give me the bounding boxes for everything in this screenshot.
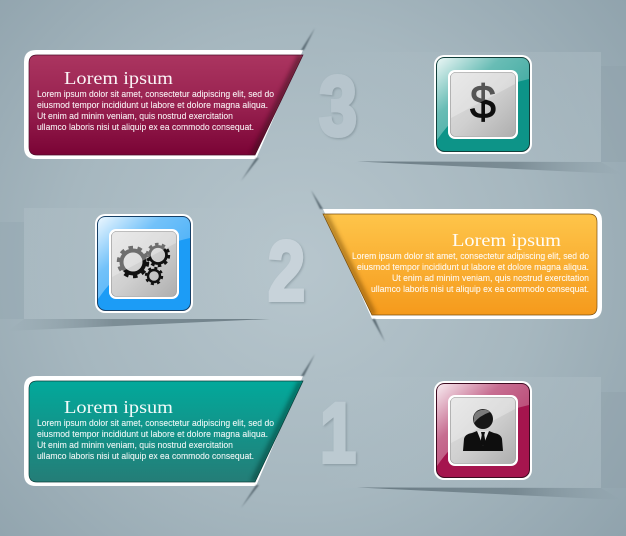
row 1 backdrop: [320, 377, 626, 500]
heading: Lorem ipsum: [64, 68, 173, 88]
body text: eiusmod tempor incididunt ut labore et dolore magna aliqua.: [37, 429, 268, 440]
icon: person: [434, 381, 532, 480]
body text: ullamco laboris nisi ut aliquip ex ea commodo consequat.: [37, 122, 254, 133]
number 1: 1: [320, 386, 356, 480]
body text: [37, 418, 274, 462]
body text: Ut enim ad minim veniam, quis nostrud exercitation: [392, 273, 589, 284]
icon: dollar: $: [470, 75, 496, 128]
panel 1: teal text card: [24, 354, 315, 508]
body text: ullamco laboris nisi ut aliquip ex ea commodo consequat.: [37, 451, 254, 462]
panel 2: orange text card: [311, 190, 602, 342]
row 2 backdrop: [0, 208, 270, 331]
number 3: 3: [319, 59, 357, 153]
body text: Lorem ipsum dolor sit amet, consectetur adipiscing elit, sed do: [37, 418, 274, 429]
gears: [118, 244, 169, 284]
body text: [352, 251, 589, 295]
icon: dollar: [434, 55, 532, 154]
body text: [37, 89, 274, 133]
panel 3: maroon text card: [24, 28, 315, 181]
row 3 backdrop: [320, 52, 626, 174]
slit tips: [241, 354, 315, 508]
slit tips: [241, 28, 315, 181]
body text: Ut enim ad minim veniam, quis nostrud exercitation: [37, 111, 233, 122]
body text: Ut enim ad minim veniam, quis nostrud exercitation: [37, 440, 233, 451]
number 2: 2: [268, 224, 305, 318]
body text: Lorem ipsum dolor sit amet, consectetur adipiscing elit, sed do: [352, 251, 589, 262]
slit tips: [311, 190, 385, 342]
heading: Lorem ipsum: [452, 230, 561, 250]
body text: Lorem ipsum dolor sit amet, consectetur adipiscing elit, sed do: [37, 89, 274, 100]
body text: eiusmod tempor incididunt ut labore et dolore magna aliqua.: [37, 100, 268, 111]
body text: ullamco laboris nisi ut aliquip ex ea commodo consequat.: [371, 284, 589, 295]
body text: eiusmod tempor incididunt ut labore et dolore magna aliqua.: [357, 262, 589, 273]
heading: Lorem ipsum: [64, 397, 173, 417]
icon: gears: [95, 214, 193, 313]
person figure: [463, 409, 503, 451]
